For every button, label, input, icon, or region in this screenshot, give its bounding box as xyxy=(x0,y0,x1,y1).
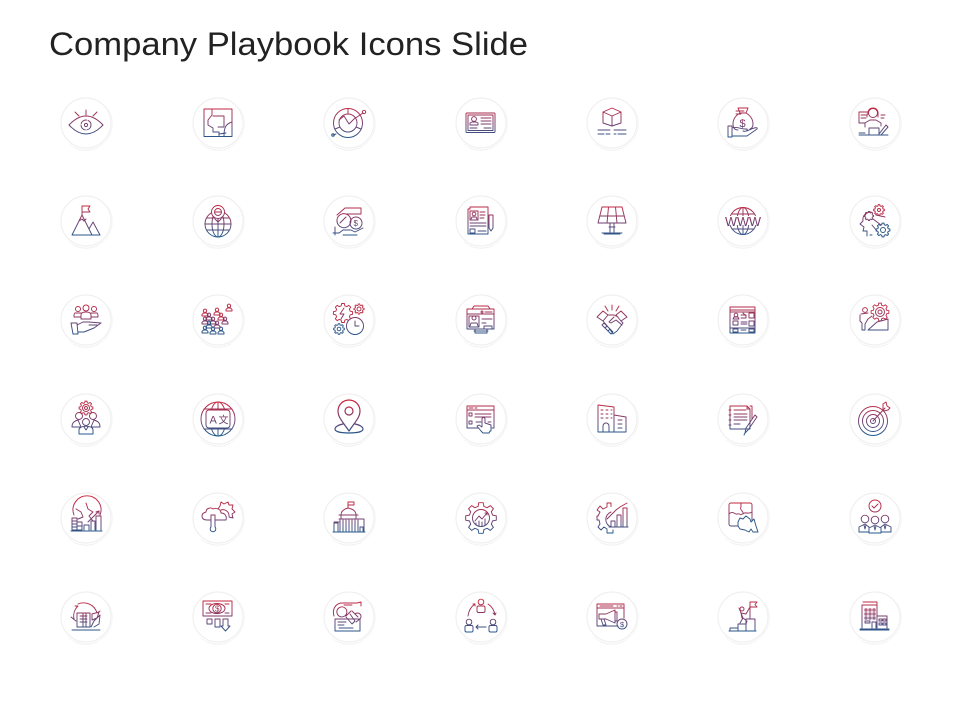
icon: crowd group xyxy=(193,295,244,347)
icon: www globe xyxy=(718,196,769,248)
icon: stamp on document xyxy=(324,592,375,644)
icon: solar panel xyxy=(587,196,638,248)
icon: money bag on hand: $ xyxy=(740,118,746,130)
icon: radar chart xyxy=(324,98,375,150)
icon: web profile screen xyxy=(456,295,507,347)
icon: capitol building xyxy=(324,493,375,545)
icon: gears and clock xyxy=(324,295,375,347)
icon: climbing with gear xyxy=(850,295,901,347)
icon: building with recycle arrows xyxy=(61,592,112,644)
icon: climbing to flag xyxy=(718,592,769,644)
icon: notebook and pencil xyxy=(718,394,769,446)
icon: id card xyxy=(456,98,507,150)
icon: banknote with arrow xyxy=(193,592,244,644)
icon: head with gears xyxy=(850,196,901,248)
icon: weather thermometer xyxy=(193,493,244,545)
icon: gear with bar chart xyxy=(587,493,638,545)
icon: resume document xyxy=(456,196,507,248)
icon: translation globe: 文 xyxy=(218,414,228,426)
icon: banknote with arrow: $ xyxy=(215,604,220,614)
icon: people on hand xyxy=(61,295,112,347)
icon: www globe: WWW xyxy=(725,214,762,229)
icon: people with gear xyxy=(61,394,112,446)
icon: location pin xyxy=(324,394,375,446)
icon: data table page xyxy=(718,295,769,347)
icon: money bag on hand xyxy=(718,98,769,150)
icon: hotel building xyxy=(850,592,901,644)
icon: floor map xyxy=(193,98,244,150)
icon: translation globe: A xyxy=(210,414,218,426)
icon: gear with chart xyxy=(456,493,507,545)
icon: handshake xyxy=(587,295,638,347)
icon: eye xyxy=(61,98,112,150)
icon: support agent xyxy=(850,98,901,150)
icon: office buildings xyxy=(587,394,638,446)
icon: web checklist click xyxy=(456,394,507,446)
icon: hand with money and chart xyxy=(324,196,375,248)
icon: browser megaphone: $ xyxy=(620,620,625,629)
icon: globe with pin xyxy=(193,196,244,248)
icon: target with arrow xyxy=(850,394,901,446)
title: Company Playbook Icons Slide xyxy=(49,26,528,62)
icon: browser megaphone xyxy=(587,592,638,644)
icon: puzzle with hand xyxy=(718,493,769,545)
icon: hand with money and chart: $ xyxy=(354,219,358,228)
icon: translation globe xyxy=(193,394,244,446)
icon: team with checkmark xyxy=(850,493,901,545)
icon: globe and growth bars xyxy=(61,493,112,545)
icon: people cycle xyxy=(456,592,507,644)
icon: box dimensions xyxy=(587,98,638,150)
icon: mountain flag xyxy=(61,196,112,248)
